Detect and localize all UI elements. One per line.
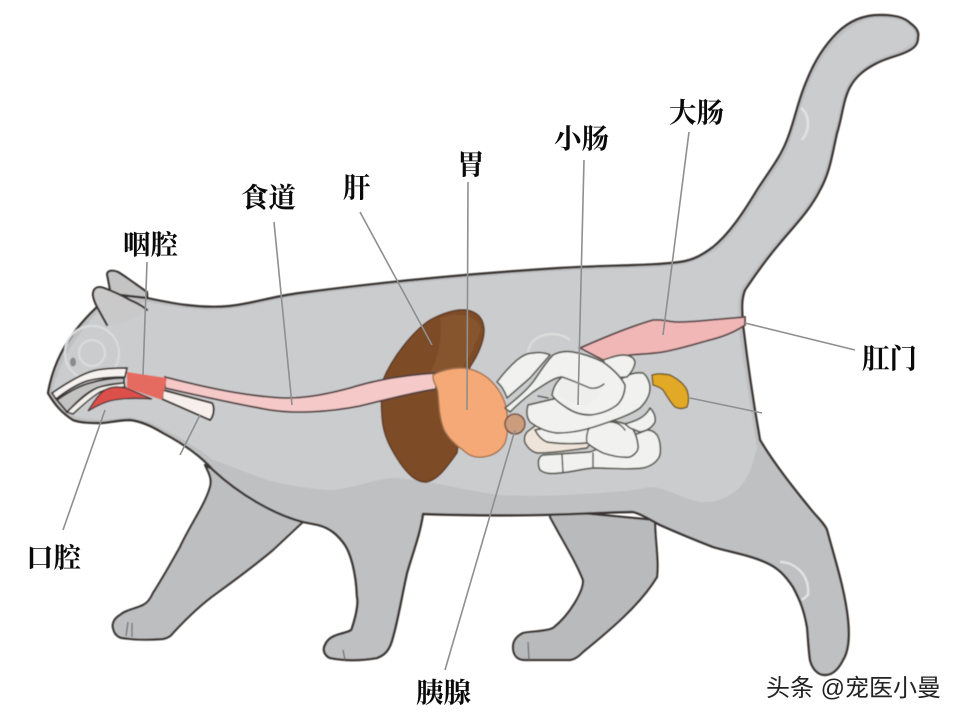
far hind leg — [513, 510, 658, 660]
coil folds — [538, 377, 625, 472]
watermark arc on tail — [801, 108, 808, 140]
far ear — [107, 271, 148, 312]
oral cavity tongue — [88, 387, 152, 411]
beige back fold — [524, 422, 600, 453]
trachea — [162, 390, 214, 420]
watermark arc on gut — [528, 334, 570, 352]
paw toe lines — [126, 622, 529, 660]
label: 肛门: 肛门 — [862, 343, 917, 374]
label: 食道: 食道 — [241, 182, 296, 213]
right bump — [625, 408, 655, 432]
label: 肝: 肝 — [343, 172, 370, 203]
large intestine — [580, 317, 745, 360]
bottom coil — [538, 430, 660, 474]
label: 小肠: 小肠 — [554, 123, 609, 154]
pancreas — [505, 414, 525, 434]
esophagus — [165, 373, 436, 412]
stomach — [433, 368, 508, 457]
watermark swirl on head — [65, 326, 119, 380]
leader lines — [63, 132, 855, 670]
far front leg — [113, 465, 305, 640]
near ear — [93, 287, 147, 325]
lighter upper body — [52, 18, 915, 502]
big white blob — [527, 373, 650, 433]
yellow gland — [652, 374, 688, 408]
cat eye — [70, 358, 76, 366]
liver — [381, 310, 484, 482]
label: 胰腺: 胰腺 — [416, 677, 471, 708]
middle coil — [535, 420, 638, 457]
main tube loop — [505, 351, 625, 415]
liver shading — [430, 315, 481, 373]
top-left loop — [497, 353, 550, 398]
near ear outline — [93, 287, 147, 325]
label: 咽腔: 咽腔 — [123, 229, 178, 260]
label: 大肠: 大肠 — [669, 97, 724, 128]
mouth stripes — [52, 368, 127, 399]
watermark arc on hind leg — [780, 562, 808, 600]
label: 口腔: 口腔 — [26, 542, 81, 573]
inner crescent fill — [558, 377, 604, 405]
small intestine — [497, 351, 660, 474]
pharynx — [127, 372, 167, 400]
label: 胃: 胃 — [457, 149, 484, 180]
watermark text: 头条 @宠医小曼 — [766, 675, 941, 702]
top right bump — [603, 355, 635, 378]
